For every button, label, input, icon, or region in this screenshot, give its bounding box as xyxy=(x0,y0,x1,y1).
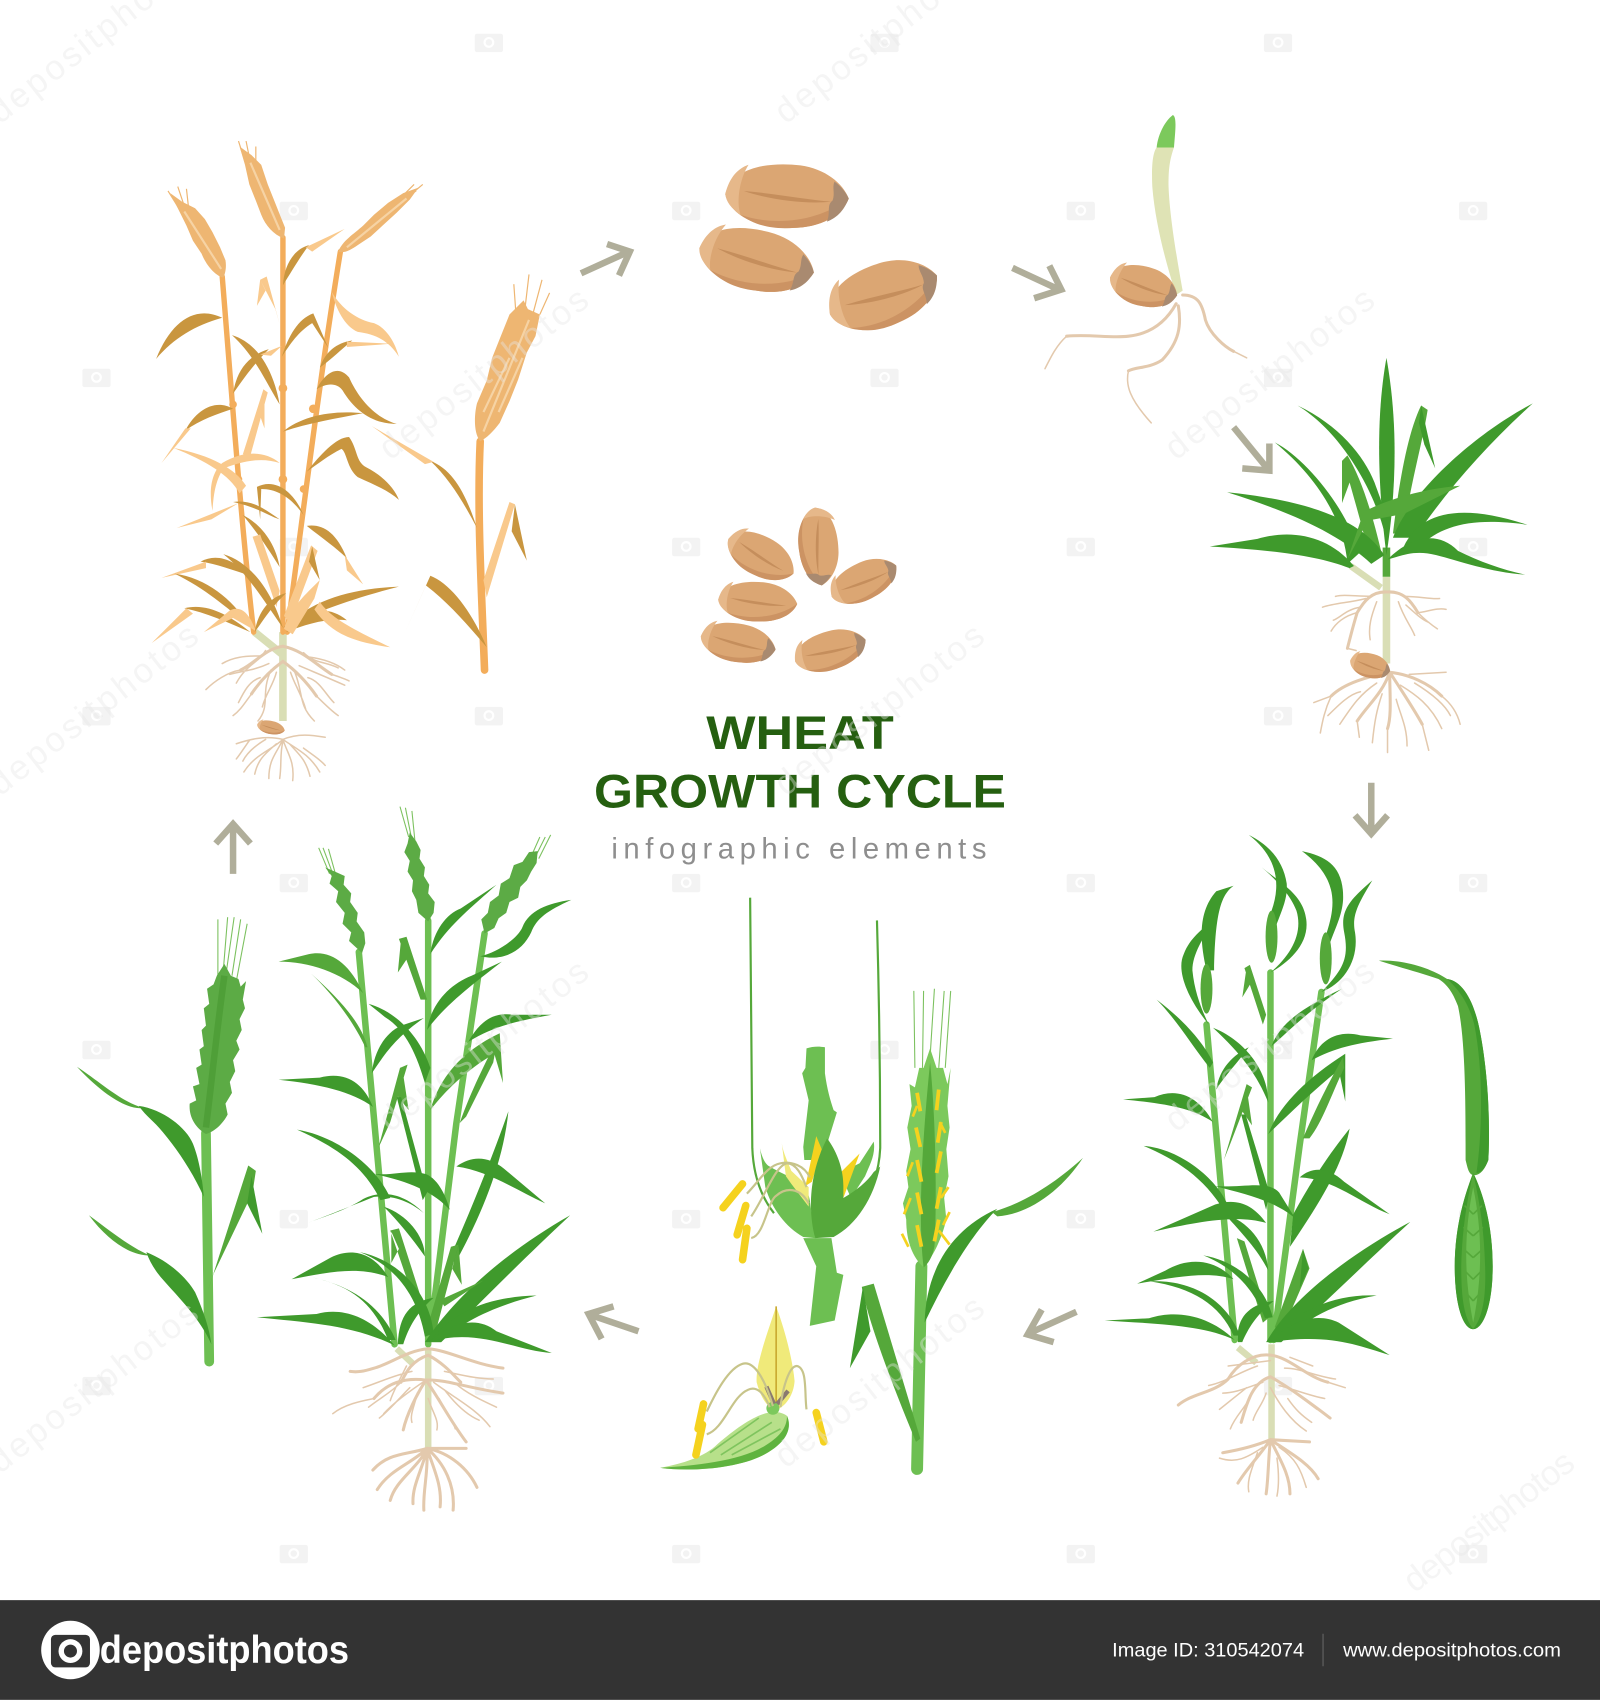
large green ear xyxy=(190,917,247,1134)
golden plant roots xyxy=(206,632,349,781)
arrow: flowering to milk stage xyxy=(589,1306,638,1339)
title xyxy=(594,707,1006,819)
footer logo icon xyxy=(41,1621,100,1679)
footer bar xyxy=(0,1600,1600,1700)
arrow: booting to flowering xyxy=(1028,1310,1076,1342)
golden ears xyxy=(168,141,423,278)
green stem leaves xyxy=(77,1067,262,1344)
young plant stem and roots xyxy=(1314,548,1460,752)
footer logo text: depositphotos xyxy=(100,1629,349,1672)
stage: germinating seed xyxy=(1045,115,1247,423)
stage: flowering floret detail xyxy=(723,898,880,1326)
booting plant leaves xyxy=(1105,835,1410,1355)
young plant leaves xyxy=(1210,358,1533,575)
stage: single ripe stem with ear xyxy=(372,274,550,670)
title: WHEAT xyxy=(706,707,894,760)
stage: booting plant with roots xyxy=(1105,835,1410,1496)
floret awns xyxy=(750,898,880,1213)
title: GROWTH CYCLE xyxy=(594,766,1006,819)
watermark text: depositphotos xyxy=(1396,1443,1582,1600)
golden stems xyxy=(222,238,340,632)
watermark text: depositphotos xyxy=(1158,952,1382,1139)
watermark camera icons xyxy=(82,34,1487,1563)
flowering ear xyxy=(902,989,951,1267)
detail: enclosed ear inside leaf sheath xyxy=(1379,960,1493,1329)
arrow: green ear to ripe plant xyxy=(216,824,250,874)
flowering stem leaves xyxy=(850,1158,1083,1442)
arrow: seeds to germination xyxy=(1012,266,1061,298)
stage: young plant with roots xyxy=(1210,358,1533,752)
stage: wheat seeds xyxy=(693,162,948,344)
green plant leaves xyxy=(257,885,571,1353)
stage: mature golden plant with roots xyxy=(152,141,423,781)
central seed cluster xyxy=(697,506,904,680)
arrow: young plant to booting plant xyxy=(1355,783,1388,834)
floret anthers and filaments xyxy=(723,1163,810,1260)
subtitle: infographic elements xyxy=(611,834,986,866)
golden leaves xyxy=(152,229,399,647)
floret bracts xyxy=(760,1136,880,1238)
arrow: germination to young plant xyxy=(1234,427,1269,471)
booting ears xyxy=(1201,911,1332,1014)
booting plant stems and roots xyxy=(1178,972,1345,1496)
watermark text: depositphotos xyxy=(372,952,596,1139)
stage: flowering stem with ear xyxy=(850,989,1083,1469)
green plant ears xyxy=(319,807,551,953)
detail: opened floret with grain xyxy=(660,1306,824,1469)
green plant stems and roots xyxy=(333,920,503,1510)
stage: single stem with large green ear xyxy=(77,917,262,1362)
watermark text: depositphotos xyxy=(767,1288,992,1475)
watermark text: depositphotos xyxy=(372,280,596,467)
website: www.depositphotos.com xyxy=(1342,1640,1561,1662)
watermark text: depositphotos xyxy=(1158,280,1382,467)
stage: green eared plant with roots xyxy=(257,807,571,1510)
watermark text: depositphotos xyxy=(767,616,992,803)
floret rachis xyxy=(802,1047,843,1326)
arrow: golden plant to seeds xyxy=(581,244,630,275)
image id: Image ID: 310542074 xyxy=(1112,1640,1304,1662)
